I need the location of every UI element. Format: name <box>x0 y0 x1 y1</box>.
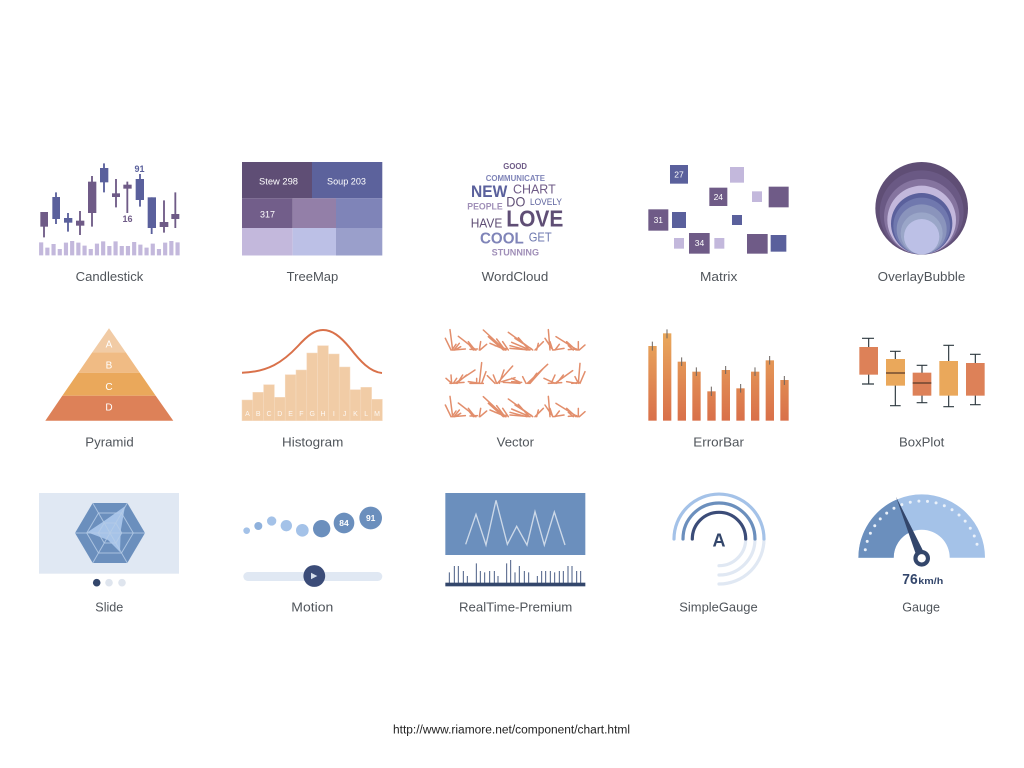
histogram chart: E <box>288 411 293 418</box>
treemap chart: Stew 298 <box>259 176 298 188</box>
panel: Matrix <box>648 165 789 284</box>
panel: OverlayBubble <box>875 162 968 284</box>
panel: BoxPlot <box>859 338 985 450</box>
box plot chart <box>859 338 985 407</box>
label: BoxPlot: BoxPlot <box>899 435 945 450</box>
panel: SimpleGauge <box>674 494 764 615</box>
panel: TreeMap <box>242 162 382 284</box>
pyramid chart: A <box>106 339 113 350</box>
pyramid chart: B <box>106 360 113 371</box>
realtime tick strip <box>445 560 585 586</box>
matrix chart: 27 <box>674 170 684 180</box>
gauge letter: A <box>712 531 726 551</box>
gauge value <box>902 571 943 588</box>
panel: Vector <box>445 330 585 450</box>
label: TreeMap: TreeMap <box>287 269 338 284</box>
pagination dots <box>93 579 126 586</box>
panel: Pyramid <box>45 328 173 450</box>
error bar chart <box>648 329 789 421</box>
realtime line chart <box>445 493 585 555</box>
simple gauge arcs <box>674 494 764 584</box>
label: Slide: Slide <box>95 600 123 615</box>
histogram chart: B <box>256 411 261 418</box>
panel: Histogram <box>242 330 382 450</box>
histogram chart <box>242 330 382 421</box>
word cloud: DO <box>506 194 525 210</box>
histogram chart: H <box>320 411 326 418</box>
play slider <box>243 565 382 587</box>
histogram chart: C <box>266 411 272 418</box>
treemap chart <box>242 162 382 256</box>
word cloud: HAVE <box>471 216 502 230</box>
gauge needle <box>896 497 928 565</box>
label: ErrorBar: ErrorBar <box>693 435 745 450</box>
gauge value: km/h <box>918 576 943 586</box>
radar chart <box>75 503 145 563</box>
label: Candlestick: Candlestick <box>76 269 144 284</box>
overlay bubble chart <box>875 162 968 255</box>
label: OverlayBubble: OverlayBubble <box>878 269 965 284</box>
treemap chart: Soup 203 <box>327 176 366 188</box>
word cloud: PEOPLE <box>467 201 503 212</box>
label: Vector: Vector <box>497 435 535 450</box>
word cloud: STUNNING <box>492 248 539 258</box>
histogram chart: J <box>343 411 346 418</box>
source url: http://www.riamore.net/component/chart.html <box>393 724 630 736</box>
histogram chart: A <box>245 411 250 418</box>
label: Motion: Motion <box>291 600 333 615</box>
vector field chart <box>445 330 585 417</box>
word cloud: COOL <box>480 231 524 248</box>
label: RealTime-Premium: RealTime-Premium <box>459 600 572 615</box>
histogram chart: K <box>353 411 358 418</box>
panel: Gauge <box>858 494 985 615</box>
panel: RealTime-Premium <box>445 493 585 615</box>
matrix chart: 34 <box>695 238 704 248</box>
word cloud: GET <box>529 230 552 245</box>
slide frame <box>39 493 179 574</box>
panel: Slide <box>39 493 179 615</box>
label: Histogram: Histogram <box>282 435 343 450</box>
word cloud: LOVELY <box>530 197 563 208</box>
pyramid chart <box>45 328 173 421</box>
word cloud: CHART <box>513 182 556 197</box>
motion bubbles: 84 <box>339 518 349 528</box>
histogram chart: D <box>277 411 282 418</box>
gauge dial <box>858 494 985 558</box>
panel: Candlestick <box>40 163 179 284</box>
matrix chart: 31 <box>654 215 663 225</box>
value label: 91: 91 <box>134 164 145 174</box>
value label: 16: 16 <box>122 214 133 224</box>
word cloud: LOVE <box>506 205 563 231</box>
label: Matrix: Matrix <box>700 269 738 284</box>
label: Gauge: Gauge <box>902 600 940 615</box>
motion bubbles: 91 <box>366 513 376 523</box>
label: SimpleGauge: SimpleGauge <box>679 600 758 615</box>
word cloud <box>467 161 563 258</box>
motion bubbles <box>243 507 382 537</box>
histogram chart: L <box>364 411 368 418</box>
word cloud: NEW <box>471 183 508 201</box>
histogram chart: F <box>299 411 304 418</box>
pyramid chart: C <box>105 382 113 393</box>
pyramid chart: D <box>105 402 113 413</box>
histogram chart: M <box>374 411 380 418</box>
label: WordCloud: WordCloud <box>482 269 548 284</box>
label: Pyramid: Pyramid <box>85 435 134 450</box>
candlestick chart <box>40 163 179 255</box>
panel: ErrorBar <box>648 329 789 450</box>
panel: Motion <box>243 507 382 615</box>
matrix chart: 24 <box>714 192 723 202</box>
word cloud: COMMUNICATE <box>486 173 545 183</box>
gauge value: 76 <box>902 571 918 588</box>
panel: WordCloud <box>467 161 563 284</box>
matrix chart <box>648 165 789 254</box>
word cloud: GOOD <box>503 161 527 171</box>
histogram chart: I <box>333 411 335 418</box>
treemap chart: 317 <box>260 210 275 220</box>
histogram chart: G <box>309 411 315 418</box>
